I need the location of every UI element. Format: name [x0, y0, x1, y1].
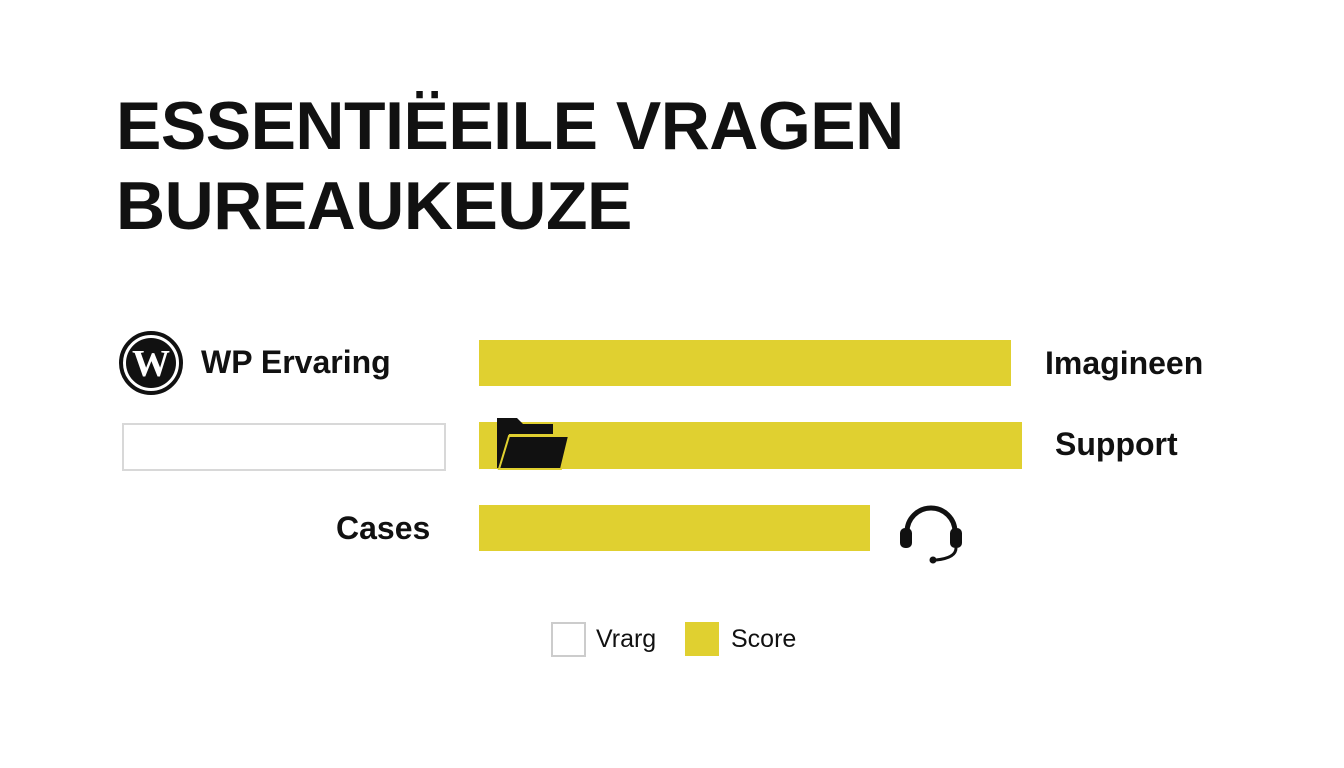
- icon: folder: [497, 418, 568, 470]
- bar: WP Ervaring: [479, 340, 1011, 386]
- icon: wordpress: [119, 331, 183, 395]
- title: ESSENTIËEILE VRAGEN: [116, 88, 904, 164]
- bar: Support: [479, 422, 1022, 469]
- label: WP Ervaring: WP Ervaring: [201, 344, 391, 380]
- legend: Score: [685, 622, 719, 656]
- legend: Vrarg: [551, 622, 586, 657]
- title: [116, 88, 904, 244]
- icon: wordpress: W: [132, 343, 170, 385]
- legend: Score: [731, 625, 796, 653]
- label: Imagineen: Imagineen: [1045, 345, 1203, 381]
- label: Support: Support: [1055, 426, 1178, 462]
- icon: headset: [900, 506, 962, 564]
- title: BUREAUKEUZE: [116, 168, 632, 244]
- empty box: [122, 423, 446, 471]
- legend: Vrarg: [596, 625, 656, 653]
- label: Cases: Cases: [336, 510, 430, 546]
- legend: [551, 622, 796, 657]
- bar: Cases: [479, 505, 870, 551]
